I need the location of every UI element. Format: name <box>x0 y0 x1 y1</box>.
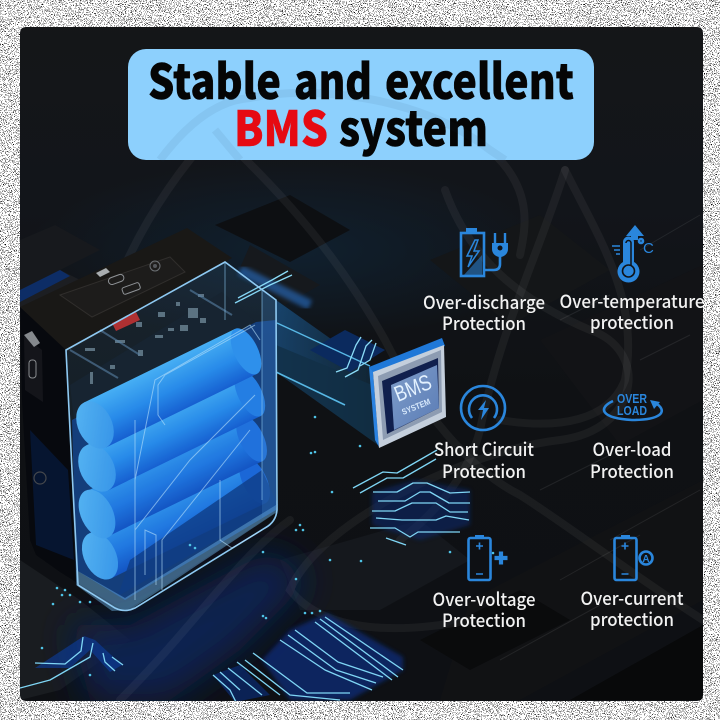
title box: system <box>339 90 488 160</box>
cell 2 <box>71 366 272 498</box>
geometric floor blocks <box>20 195 703 700</box>
circuit dots <box>41 416 494 676</box>
circuit traces: middle <box>353 450 470 545</box>
navy glow under device <box>70 550 310 700</box>
label: over-temperature: protection <box>590 309 674 335</box>
label: over-voltage <box>432 586 536 633</box>
label: over-load: Over-load <box>592 436 672 462</box>
light beam to BMS chip <box>235 270 385 445</box>
label: over-discharge: Over-discharge <box>423 289 545 315</box>
cell 4 <box>75 453 276 585</box>
title box: Stable <box>148 43 281 113</box>
label: short circuit: Short Circuit <box>434 436 534 462</box>
icon: over-current battery: A <box>642 554 650 565</box>
label: short circuit <box>434 436 534 484</box>
top plate <box>20 228 232 352</box>
label: over-current: protection <box>590 606 674 632</box>
icon: over-current battery <box>614 535 652 580</box>
label: over-load <box>590 436 674 484</box>
case inner outlines <box>135 325 262 600</box>
circuit traces: bottom left <box>20 636 123 688</box>
label: over-current <box>580 585 684 632</box>
title box: BMS <box>234 90 328 160</box>
label: over-temperature <box>560 288 704 335</box>
chip label: BMS <box>391 369 435 407</box>
BMS chip <box>369 338 446 448</box>
label: over-load: Protection <box>590 458 674 484</box>
watermark curves <box>100 98 703 700</box>
title watermark overlay <box>160 93 505 160</box>
icon: over-temperature thermometer: C <box>643 240 654 257</box>
transparent case <box>66 262 278 611</box>
battery cells <box>69 324 276 585</box>
chip label <box>391 369 439 417</box>
chip label: SYSTEM <box>400 396 432 417</box>
circuit board inside case <box>70 290 256 420</box>
label: over-voltage: Protection <box>442 607 526 633</box>
case back tint <box>72 320 276 600</box>
icon: short circuit <box>461 386 505 430</box>
label: over-discharge: Protection <box>442 310 526 336</box>
icon: over-temperature thermometer <box>612 225 654 283</box>
title box: and <box>294 43 372 113</box>
icon: over-load: LOAD <box>617 403 647 418</box>
device body <box>20 228 232 582</box>
label: over-current: Over-current <box>580 585 684 611</box>
icon: over-voltage battery <box>468 535 508 580</box>
icon: over-load: OVER <box>617 391 647 406</box>
cell 1 <box>69 324 268 455</box>
title box <box>128 43 594 160</box>
title box: excellent <box>385 43 574 113</box>
label: short circuit: Protection <box>442 458 526 484</box>
faint diagonal streaks <box>500 215 700 660</box>
icon: over-load <box>604 391 662 420</box>
label: over-temperature: Over-temperature <box>560 288 704 314</box>
label: over-voltage: Over-voltage <box>432 586 536 612</box>
circuit traces: bottom right <box>213 613 403 702</box>
icon: over-discharge battery and plug <box>461 228 508 276</box>
side wall <box>20 307 76 582</box>
cell 3 <box>71 410 274 544</box>
label: over-discharge <box>423 289 545 336</box>
beam circuit traces <box>235 271 376 377</box>
